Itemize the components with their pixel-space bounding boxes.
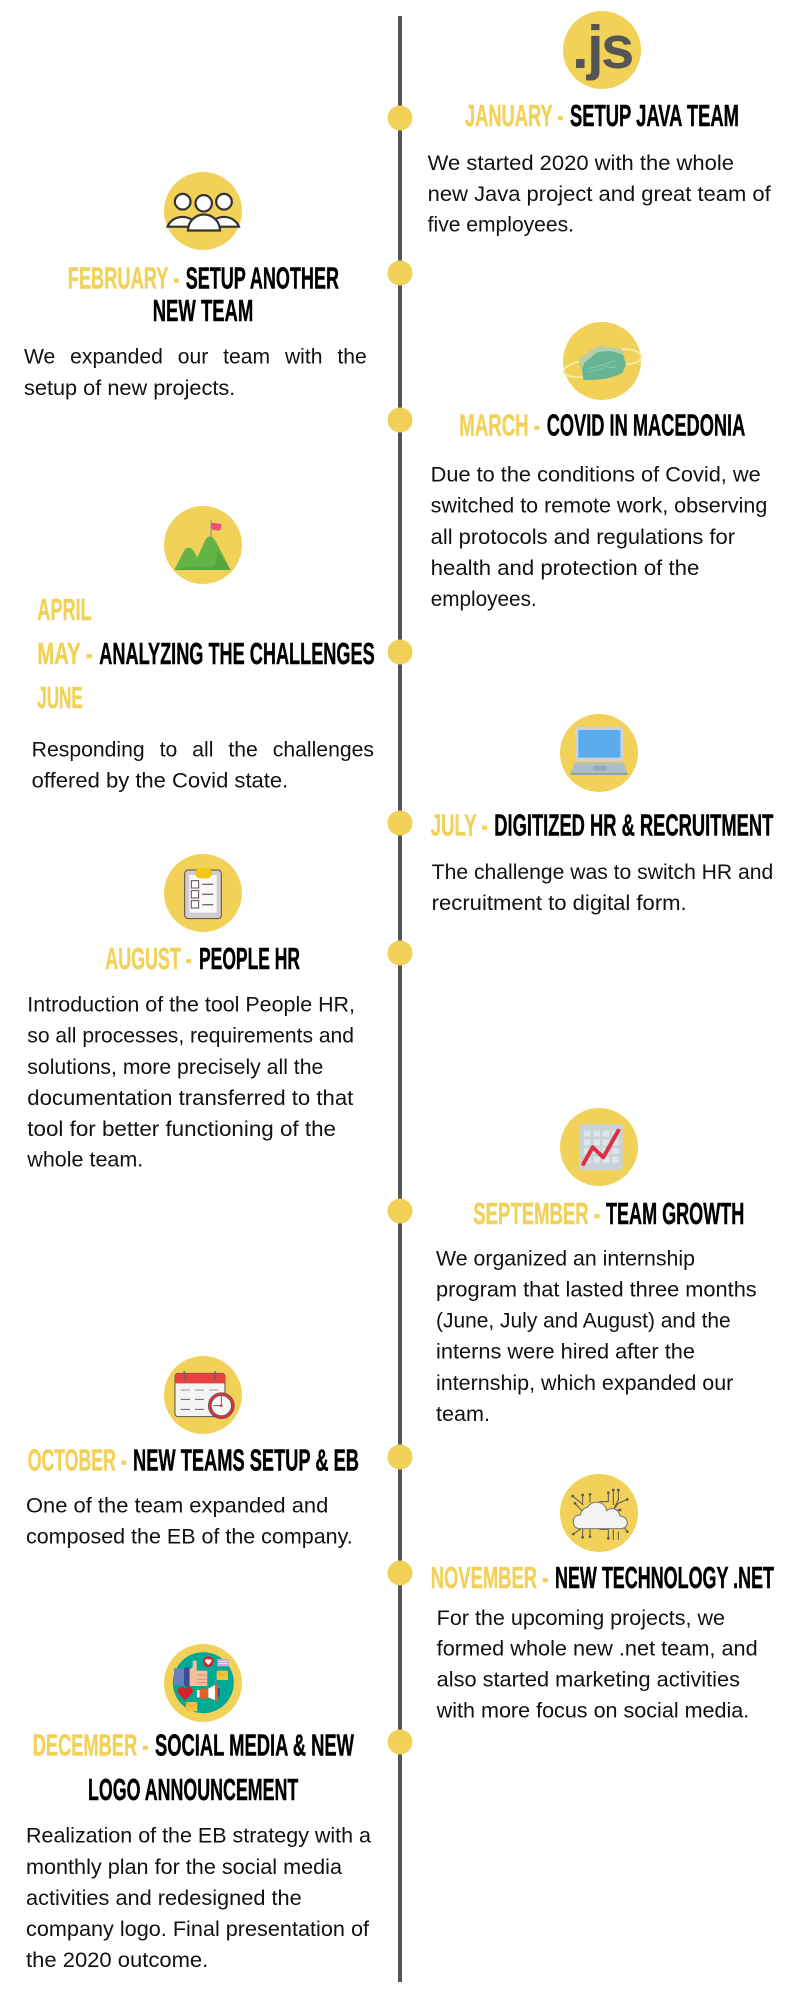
panel: December [26,1644,371,1972]
text: December: company logo. Final presentation of [26,1918,369,1941]
heading: August: AUGUST - [105,941,192,976]
heading: December: LOGO ANNOUNCEMENT [88,1772,298,1807]
heading: April May June: MAY - [37,636,93,671]
panel: November [431,1474,774,1723]
text: December: Realization of the EB strategy with a [26,1825,371,1848]
heading: October: OCTOBER - [28,1443,127,1478]
heading: April May June: APRIL [37,592,92,627]
text: March [431,464,767,611]
icon: social media [164,1644,242,1722]
panel: January [428,11,771,237]
text: September: (June, July and August) and the [436,1310,731,1333]
text: August: Introduction of the tool People HR, [27,994,355,1017]
text: April May June: Responding to all the challenges [32,739,374,762]
text: November: For the upcoming projects, we [437,1607,725,1630]
text: September [436,1248,757,1426]
text: November [436,1607,758,1723]
text: November: also started marketing activities [437,1669,740,1692]
heading: November [431,1560,774,1595]
panel: October [26,1356,359,1548]
text: February: We expanded our team with the [24,345,367,368]
text: November: with more focus on social media. [436,1700,749,1723]
text: April May June: offered by the Covid state. [32,770,288,793]
icon: growth chart [560,1108,638,1186]
icon: js: .js [572,14,634,81]
heading: February: FEBRUARY - [68,261,179,296]
icon: face mask [563,322,641,400]
text: August [26,994,355,1172]
text: December: activities and redesigned the [26,1887,302,1910]
heading: February: NEW TEAM [153,293,253,328]
text: February: setup of new projects. [24,377,235,400]
icon: team [164,172,242,250]
heading: March: MARCH - [459,408,540,443]
icon: calendar clock [164,1356,242,1434]
heading: April May June [37,592,375,715]
panel: August [26,854,355,1172]
icon: laptop [560,714,638,792]
text: September: We organized an internship [436,1248,695,1271]
text: November: formed whole new .net team, and [437,1638,758,1661]
panel: July [431,714,773,915]
text: March: employees. [431,588,537,611]
heading: August: PEOPLE HR [199,941,300,976]
text: December: monthly plan for the social media [26,1856,342,1879]
panel: March [431,322,767,611]
heading: October [28,1443,359,1478]
heading: January: JANUARY - [465,98,564,133]
heading: September: SEPTEMBER - [473,1196,600,1231]
text: July: recruitment to digital form. [432,892,687,915]
text: September: internship, which expanded our [436,1372,733,1395]
heading: December: SOCIAL MEDIA & NEW [155,1728,354,1763]
heading: July: JULY - [431,808,488,843]
text: March: Due to the conditions of Covid, we [431,464,761,487]
text: March: all protocols and regulations for [431,526,735,549]
heading: December: DECEMBER - [33,1728,148,1763]
heading: October: NEW TEAMS SETUP & EB [133,1443,359,1478]
text: September: interns were hired after the [436,1341,695,1364]
text: March: switched to remote work, observing [431,495,767,518]
text: August: documentation transferred to that [27,1087,353,1110]
heading: April May June: JUNE [37,680,83,715]
panel: April May June [32,506,375,793]
text: December [26,1825,371,1972]
text: February [24,345,367,400]
heading: April May June: ANALYZING THE CHALLENGES [99,636,375,671]
panel: February [24,172,367,400]
icon: cloud circuit [560,1474,638,1552]
text: August: solutions, more precisely all the [27,1056,323,1079]
panel: September [436,1108,757,1426]
text: January: new Java project and great team of [428,183,771,206]
text: July [432,861,773,915]
timeline axis with dots [388,16,412,1982]
text: September: program that lasted three months [436,1279,757,1302]
text: October: One of the team expanded and [26,1495,328,1518]
text: March: health and protection of the [431,557,699,580]
text: July: The challenge was to switch HR and [432,861,773,884]
icon: clipboard [164,854,242,932]
heading: February: SETUP ANOTHER [186,261,339,296]
text: October [26,1495,353,1548]
text: August: tool for better functioning of the [27,1118,336,1141]
text: August: so all processes, requirements and [27,1025,354,1048]
heading: February [68,261,339,328]
heading: November: NOVEMBER - [431,1560,548,1595]
text: April May June [32,739,374,793]
heading: December [33,1728,354,1807]
heading: January [465,98,739,133]
text: December: the 2020 outcome. [26,1949,208,1972]
text: August: whole team. [26,1149,143,1172]
text: September: team. [436,1403,490,1426]
heading: March [459,408,745,443]
text: October: composed the EB of the company. [26,1525,353,1548]
text: January [428,152,771,237]
icon: mountain flag [164,506,242,584]
text: January: We started 2020 with the whole [428,152,734,175]
text: January: five employees. [428,214,574,237]
icon: js [563,11,641,89]
